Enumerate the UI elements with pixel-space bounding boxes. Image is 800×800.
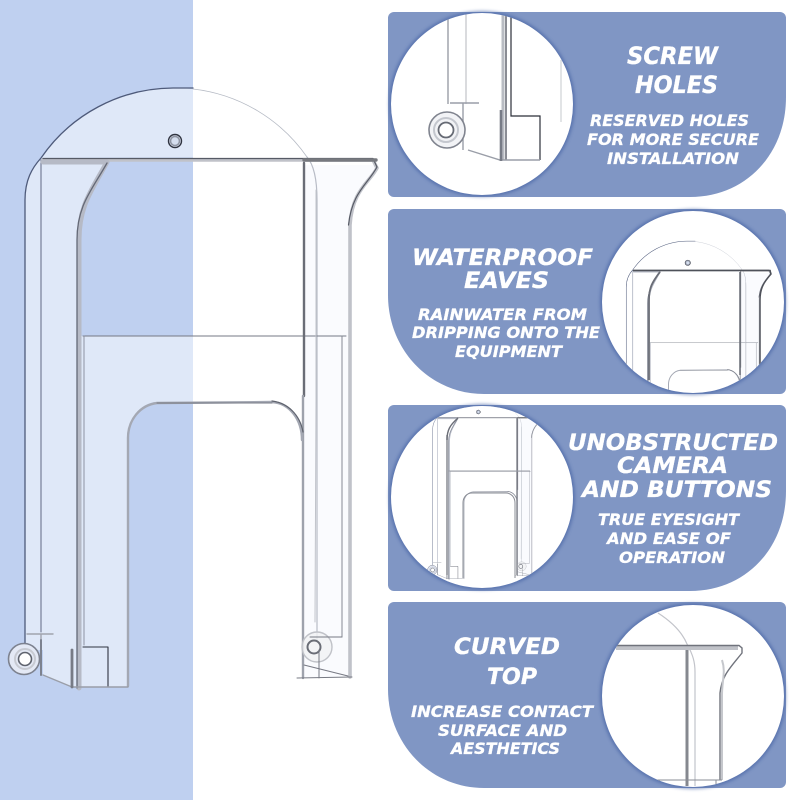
- text: waterproof eaves description: EQUIPMENT: [455, 342, 563, 361]
- text: waterproof eaves description: DRIPPING ONTO THE: [412, 323, 600, 342]
- panel background: [388, 602, 786, 788]
- text: curved top description: SURFACE AND: [438, 721, 567, 740]
- main product: clear acrylic doorbell cover: [8, 88, 377, 688]
- heading: waterproof eaves: [412, 246, 593, 294]
- heading: curved top: TOP: [487, 665, 537, 690]
- text: screw holes description: INSTALLATION: [607, 149, 740, 168]
- heading: unobstructed camera and buttons: AND BUTTONS: [580, 478, 772, 503]
- circle: camera opening close-up: [389, 396, 575, 590]
- text: camera description: AND EASE OF: [605, 529, 731, 548]
- heading: unobstructed camera and buttons: [568, 431, 778, 503]
- heading: curved top: [454, 635, 560, 690]
- panel background: [388, 209, 786, 394]
- heading: screw holes: HOLES: [635, 71, 718, 99]
- panel: waterproof eaves: [388, 206, 788, 397]
- heading: screw holes: [627, 42, 719, 99]
- heading: waterproof eaves: WATERPROOF: [412, 246, 593, 271]
- blue background strip: [0, 0, 193, 800]
- text: camera description: TRUE EYESIGHT: [598, 510, 740, 529]
- text: screw holes description: RESERVED HOLES: [590, 111, 749, 130]
- text: screw holes description: [587, 111, 759, 168]
- text: screw holes description: FOR MORE SECURE: [587, 130, 759, 149]
- panel: unobstructed camera and buttons: [388, 396, 786, 591]
- panel: curved top: [388, 602, 786, 789]
- text: curved top description: INCREASE CONTACT: [411, 702, 594, 721]
- circle: screw hole close-up: [389, 11, 575, 197]
- text: waterproof eaves description: [412, 305, 600, 361]
- panel background: [388, 405, 786, 591]
- circle: eaves close-up: [598, 206, 788, 397]
- panel: screw holes: [388, 11, 786, 197]
- text: curved top description: AESTHETICS: [449, 739, 560, 758]
- text: curved top description: [411, 702, 594, 758]
- text: camera description: [598, 510, 740, 567]
- text: waterproof eaves description: RAINWATER FROM: [418, 305, 587, 324]
- heading: unobstructed camera and buttons: CAMERA: [617, 454, 728, 479]
- text: camera description: OPERATION: [619, 548, 726, 567]
- panel background: [388, 12, 786, 197]
- circle: curved top close-up: [600, 603, 786, 789]
- heading: curved top: CURVED: [454, 635, 560, 660]
- heading: screw holes: SCREW: [627, 42, 719, 70]
- heading: waterproof eaves: EAVES: [464, 269, 549, 294]
- heading: unobstructed camera and buttons: UNOBSTRUCTED: [568, 431, 778, 456]
